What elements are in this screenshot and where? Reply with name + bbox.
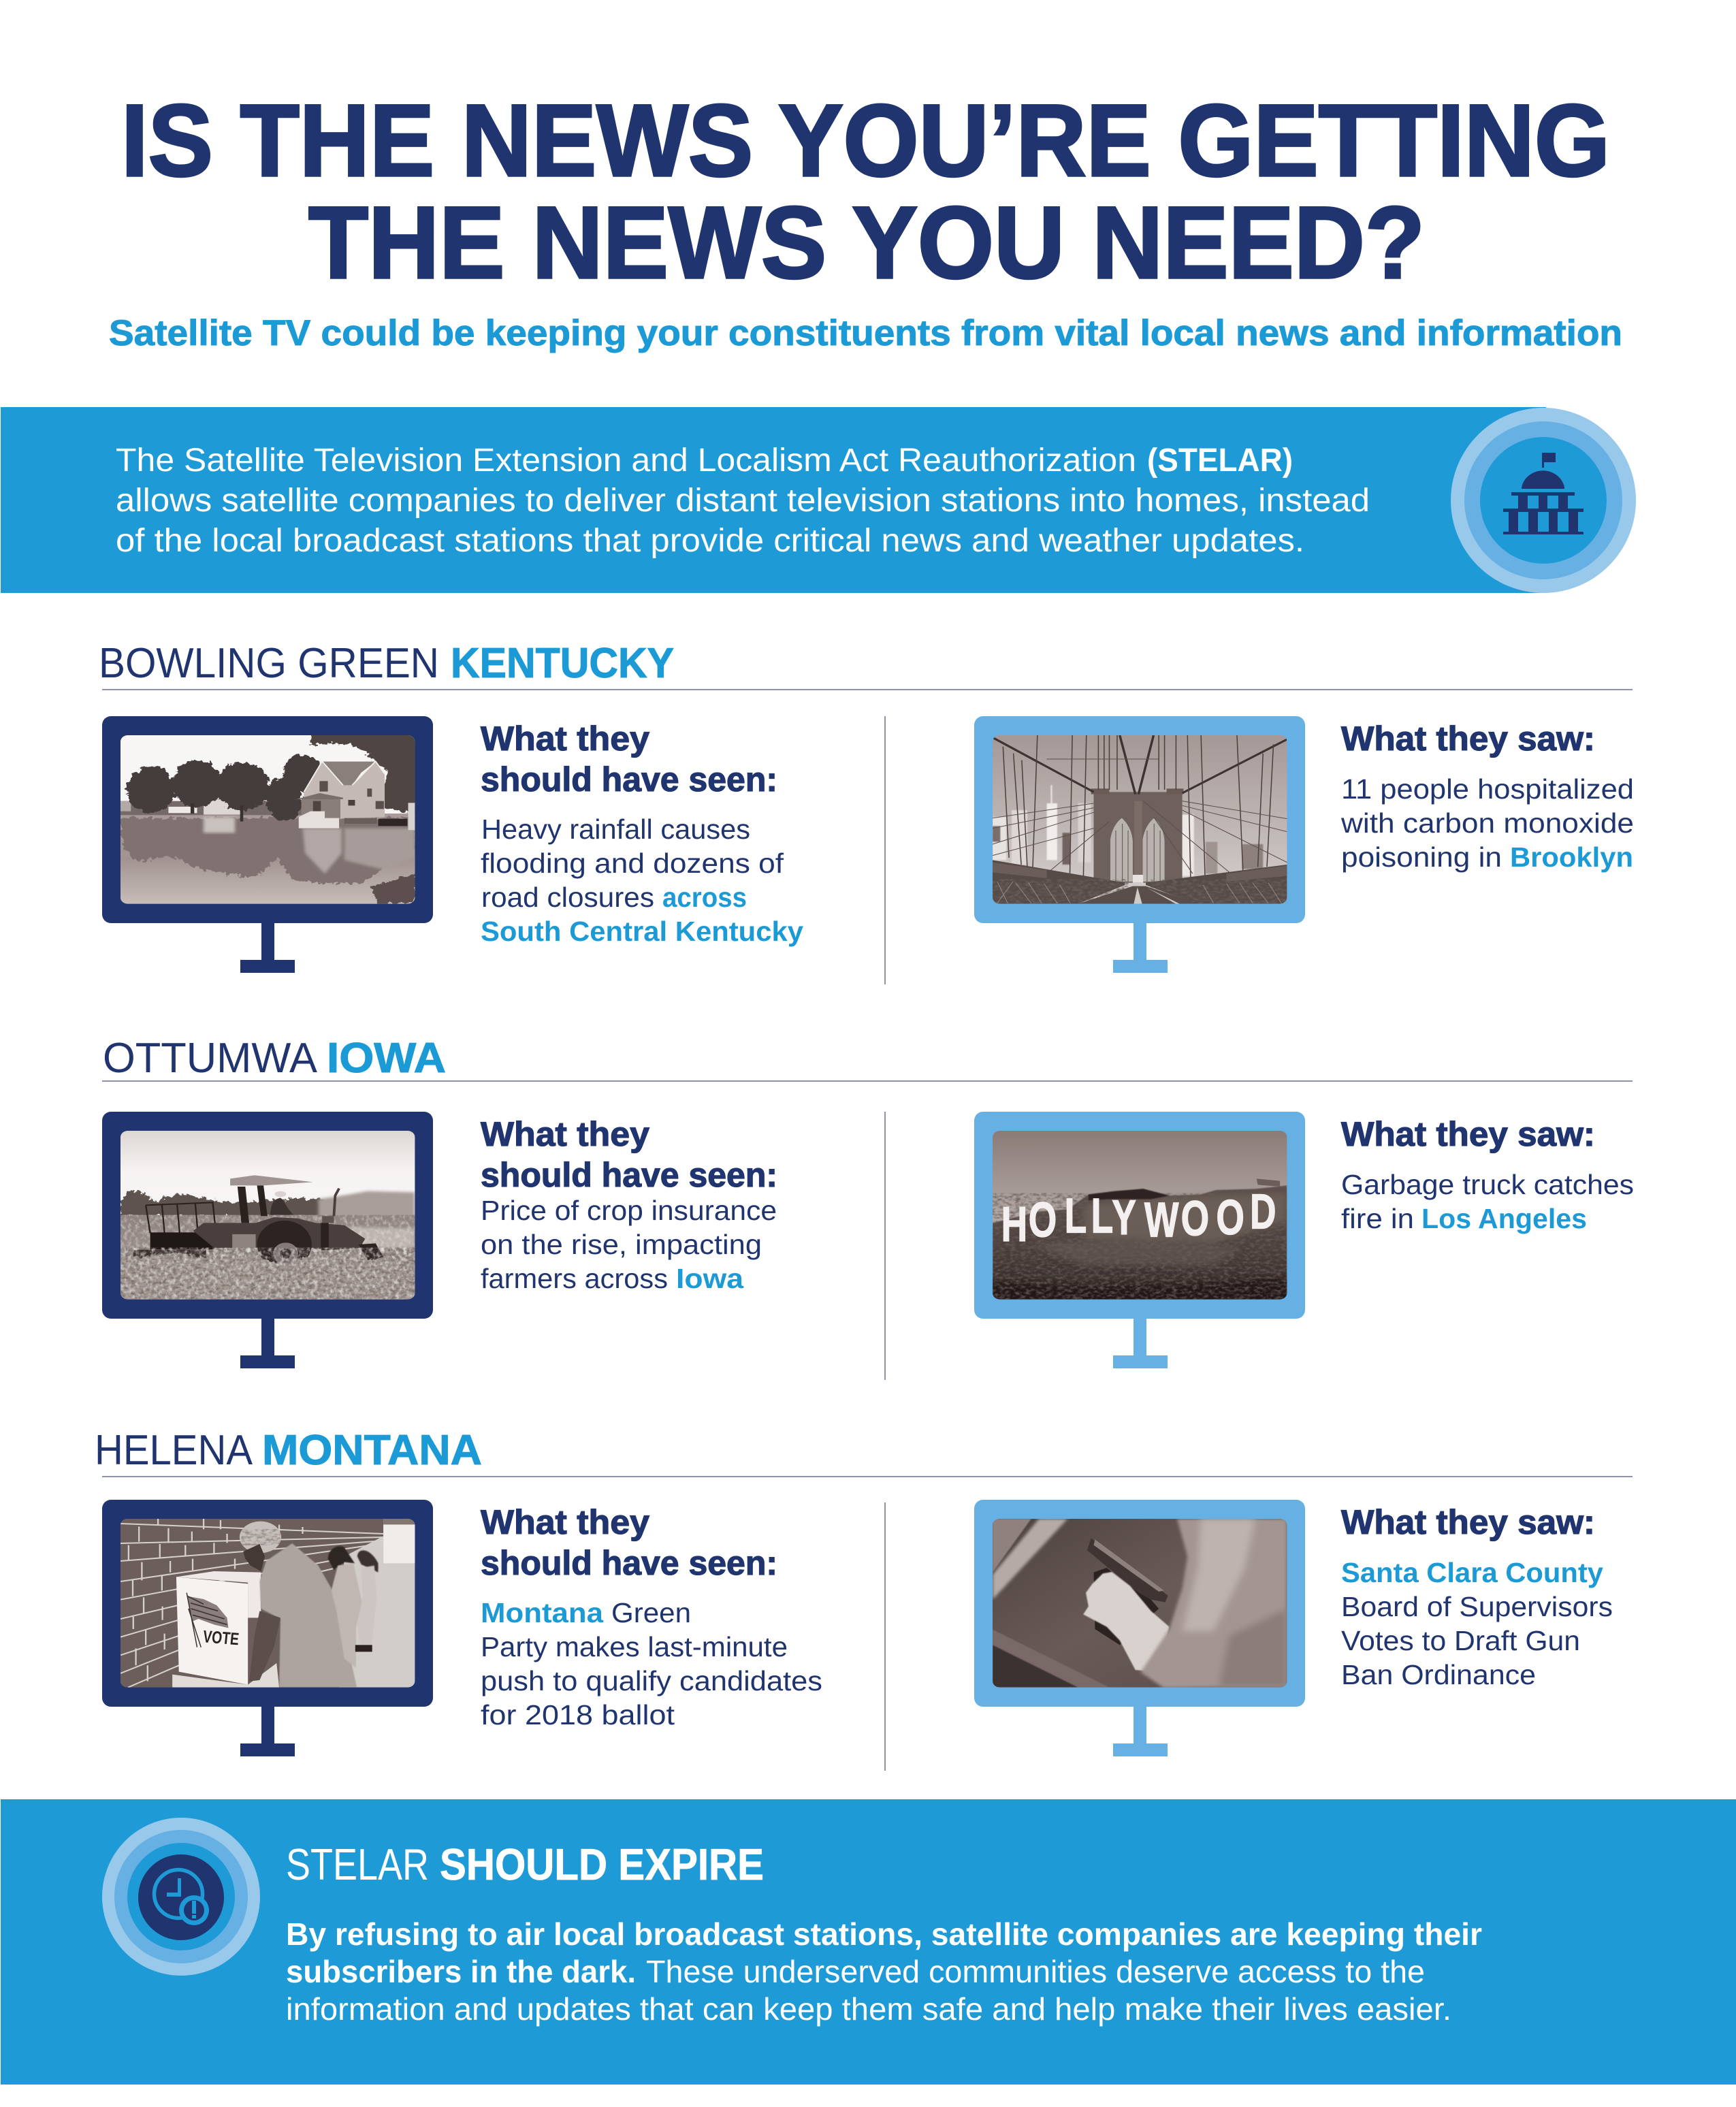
text: what they should have seen, Kentucky: Heavy rainfall causes bbox=[481, 814, 750, 845]
text: what they saw, Los Angeles bbox=[1341, 1115, 1634, 1234]
heading: STELAR should expire: SHOULD EXPIRE bbox=[440, 1839, 764, 1889]
text: what they should have seen, Iowa: What they bbox=[481, 1115, 649, 1153]
text: what they saw, Santa Clara County: What they saw: bbox=[1341, 1503, 1595, 1541]
body text: These underserved communities deserve access to the bbox=[646, 1954, 1425, 1989]
text: what they saw, Brooklyn: poisoning in bbox=[1341, 841, 1502, 873]
intro text: The Satellite Television Extension and Localism Act Reauthorization bbox=[116, 443, 1136, 479]
monitor: Hollywood sign photo bbox=[974, 1112, 1305, 1368]
text: what they should have seen, Kentucky bbox=[481, 720, 803, 947]
text: what they should have seen, Montana: Green bbox=[611, 1597, 691, 1628]
text: what they saw, Brooklyn: 11 people hospitalized bbox=[1341, 773, 1634, 805]
section heading: Ottumwa Iowa bbox=[103, 1035, 446, 1082]
intro text: (STELAR) bbox=[1147, 443, 1293, 479]
section heading: Bowling Green Kentucky bbox=[99, 640, 674, 687]
text: what they should have seen, Iowa: Iowa bbox=[676, 1263, 744, 1294]
text: what they saw, Santa Clara County: Santa Clara County bbox=[1341, 1557, 1603, 1588]
section heading: Helena Montana: HELENA bbox=[95, 1427, 253, 1474]
body text: information and updates that can keep them safe and help make their lives easier. bbox=[286, 1991, 1451, 2027]
heading: STELAR should expire bbox=[286, 1839, 764, 1889]
text: what they should have seen, Montana: Party makes last-minute bbox=[481, 1631, 788, 1662]
monitor: flooded street photo bbox=[102, 716, 433, 973]
title: IS THE NEWS YOU’RE GETTING bbox=[121, 83, 1610, 197]
text: what they saw, Santa Clara County: Ban Ordinance bbox=[1341, 1659, 1536, 1690]
monitor: voting booth photo bbox=[102, 1500, 433, 1756]
text: what they should have seen, Montana bbox=[481, 1503, 822, 1731]
monitor: hand reaching for gun photo bbox=[974, 1500, 1305, 1756]
text: what they saw, Los Angeles: Garbage truck catches bbox=[1341, 1169, 1634, 1200]
section heading: Ottumwa Iowa: IOWA bbox=[327, 1035, 446, 1082]
text: what they should have seen, Iowa: should have seen: bbox=[481, 1156, 777, 1194]
text: what they should have seen, Montana: push to qualify candidates bbox=[481, 1665, 822, 1696]
text: what they should have seen, Iowa: farmers across bbox=[481, 1263, 668, 1294]
text: what they should have seen, Kentucky: What they bbox=[481, 720, 649, 758]
intro text: allows satellite companies to deliver distant television stations into homes, instead bbox=[116, 483, 1370, 519]
section heading: Bowling Green Kentucky: KENTUCKY bbox=[451, 640, 674, 687]
intro text: of the local broadcast stations that provide critical news and weather updates. bbox=[116, 523, 1304, 559]
text: what they should have seen, Montana: Montana bbox=[481, 1597, 604, 1628]
panel: Helena Montana bbox=[95, 1427, 1633, 1771]
body text: By refusing to air local broadcast stations, satellite companies are keeping their bbox=[286, 1916, 1482, 1952]
heading: STELAR should expire: STELAR bbox=[286, 1839, 429, 1889]
subtitle: Satellite TV could be keeping your constituents from vital local news and information bbox=[109, 313, 1622, 353]
text: what they saw, Santa Clara County: Board of Supervisors bbox=[1341, 1591, 1613, 1622]
text: what they should have seen, Kentucky: flooding and dozens of bbox=[481, 848, 784, 879]
monitor: Hollywood sign photo: HOLLYWOOD bbox=[1001, 1184, 1276, 1252]
panel: STELAR should expire banner bbox=[1, 1799, 1736, 2085]
text: what they should have seen, Kentucky: should have seen: bbox=[481, 760, 777, 799]
intro text bbox=[116, 443, 1370, 559]
text: what they should have seen, Iowa: Price of crop insurance bbox=[481, 1195, 777, 1226]
body text: subscribers in the dark. bbox=[286, 1954, 636, 1989]
panel: Ottumwa Iowa bbox=[102, 1035, 1634, 1380]
text: what they should have seen, Kentucky: road closures bbox=[481, 882, 654, 913]
text: what they should have seen, Iowa bbox=[481, 1115, 777, 1294]
body text bbox=[286, 1916, 1482, 2027]
text: what they saw, Brooklyn: Brooklyn bbox=[1510, 841, 1633, 873]
panel: Bowling Green Kentucky bbox=[99, 640, 1634, 984]
text: what they should have seen, Iowa: on the rise, impacting bbox=[481, 1229, 762, 1260]
icon: capitol building in concentric circles bbox=[1451, 408, 1636, 593]
text: what they should have seen, Kentucky: South Central Kentucky bbox=[481, 916, 803, 947]
title: THE NEWS YOU NEED? bbox=[308, 185, 1425, 300]
text: what they should have seen, Montana: for 2018 ballot bbox=[481, 1699, 675, 1731]
text: what they saw, Brooklyn: What they saw: bbox=[1341, 720, 1595, 758]
text: what they saw, Brooklyn: with carbon monoxide bbox=[1340, 807, 1634, 839]
icon: clock with alert in concentric circles bbox=[102, 1818, 260, 1976]
section heading: Bowling Green Kentucky: BOWLING GREEN bbox=[99, 640, 439, 687]
text: what they saw, Los Angeles: What they saw: bbox=[1341, 1115, 1595, 1153]
section heading: Helena Montana: MONTANA bbox=[262, 1427, 482, 1474]
text: what they saw, Brooklyn bbox=[1340, 720, 1634, 873]
monitor: voting booth photo: VOTE bbox=[202, 1626, 240, 1649]
section heading: Helena Montana bbox=[95, 1427, 482, 1474]
text: what they should have seen, Kentucky: across bbox=[662, 882, 747, 913]
text: what they saw, Santa Clara County bbox=[1341, 1503, 1613, 1690]
text: what they saw, Santa Clara County: Votes to Draft Gun bbox=[1341, 1625, 1580, 1656]
title bbox=[121, 83, 1610, 300]
text: what they should have seen, Montana: What they bbox=[481, 1503, 649, 1541]
text: what they saw, Los Angeles: Los Angeles bbox=[1421, 1203, 1587, 1234]
text: what they saw, Los Angeles: fire in bbox=[1341, 1203, 1414, 1234]
text: what they should have seen, Montana: should have seen: bbox=[481, 1544, 777, 1582]
section heading: Ottumwa Iowa: OTTUMWA bbox=[103, 1035, 318, 1082]
monitor: Brooklyn Bridge photo bbox=[974, 716, 1305, 973]
monitor: tractor photo bbox=[102, 1112, 433, 1368]
panel: STELAR intro banner bbox=[1, 407, 1636, 593]
